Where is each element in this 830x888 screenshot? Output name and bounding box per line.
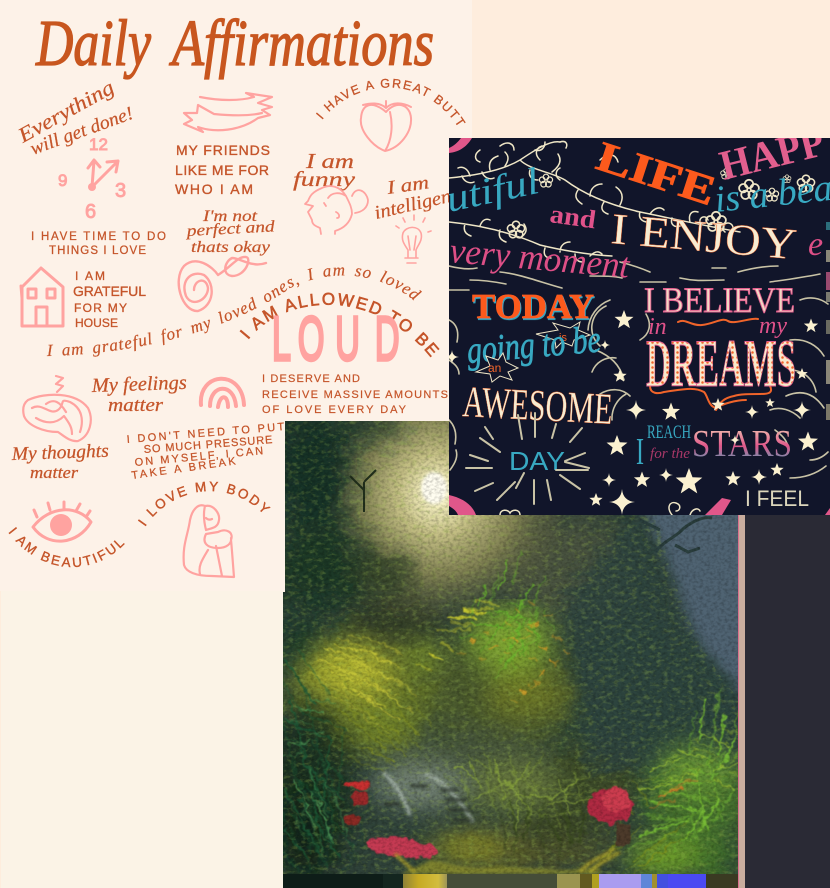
text: loud: LOUD bbox=[272, 304, 399, 374]
forest: bottom colour strip bbox=[283, 874, 739, 888]
text: i have time: I HAVE TIME TO DO bbox=[31, 231, 166, 243]
icon: self hug arm bbox=[184, 93, 272, 132]
text: my friends: MY FRIENDS bbox=[176, 142, 270, 158]
text: i don't need to put bbox=[126, 421, 285, 482]
text: day: DAY bbox=[509, 446, 565, 476]
text: my thoughts matter bbox=[10, 441, 109, 482]
edge: pink line bbox=[738, 515, 739, 888]
text: i reach for the stars: for the bbox=[650, 446, 690, 462]
text: i am funny bbox=[293, 149, 356, 191]
panel: forest painting bbox=[268, 410, 760, 888]
forest: distant tree branches bbox=[640, 518, 712, 552]
text: i am allowed to be: I AM ALLOWED TO BE bbox=[240, 292, 440, 358]
text: my thoughts matter: My thoughts bbox=[10, 441, 109, 465]
forest: sunlight glow bbox=[332, 421, 558, 618]
icon: laughing face bbox=[305, 186, 368, 234]
text: i reach for the stars: REACH bbox=[647, 422, 691, 443]
decoration: swirls bbox=[449, 298, 828, 478]
decoration: flowers bbox=[507, 169, 815, 238]
text: everything will get done bbox=[13, 75, 136, 160]
forest: mid detail patches bbox=[285, 606, 735, 870]
forest: yellow light on water bbox=[400, 860, 600, 874]
text: i am grateful for my house: HOUSE bbox=[75, 316, 118, 330]
text: i am intelligent: intelligent bbox=[372, 184, 460, 224]
text: awesome: AWESOME bbox=[461, 377, 614, 434]
text: i am funny: I am bbox=[305, 149, 354, 173]
title: Affirmations bbox=[169, 7, 434, 80]
forest: background colour masses bbox=[268, 515, 750, 880]
forest: red flowers bbox=[344, 781, 632, 862]
forest: dark rocks bbox=[384, 786, 472, 820]
text: i have a great butt: I HAVE A GREAT BUTT bbox=[316, 78, 466, 126]
text: i deserve: I DESERVE AND bbox=[262, 373, 360, 385]
icon: light bulb bbox=[396, 215, 431, 263]
text: i am funny: funny bbox=[293, 167, 356, 191]
text: i don't need to put: SO MUCH PRESSURE bbox=[143, 434, 273, 456]
text: going to be: going to be bbox=[465, 318, 602, 372]
text: in my: in bbox=[648, 314, 667, 340]
icon: eye bbox=[33, 502, 91, 541]
forest: tree in the light bbox=[350, 470, 376, 512]
icon: scribble bbox=[179, 257, 266, 311]
text: i don't need to put: TAKE A BREAK bbox=[131, 455, 237, 482]
icon: pink fragments bbox=[449, 138, 830, 515]
forest: texture bbox=[283, 421, 739, 875]
icon: burst is: is bbox=[559, 332, 567, 344]
text: e: e bbox=[808, 226, 823, 263]
text: my friends: WHO I AM bbox=[175, 181, 253, 197]
icon: house bbox=[21, 268, 63, 326]
text: i am intelligent bbox=[372, 172, 460, 224]
text: every moment: very moment bbox=[448, 230, 632, 286]
decoration: wavy divider lines bbox=[449, 262, 820, 290]
text: i don't need to put: ON MYSELF, I CAN bbox=[134, 445, 264, 469]
panel: dark side block bbox=[745, 515, 830, 888]
forest: moss ribbon bbox=[395, 848, 620, 872]
icon: burst is bbox=[536, 322, 590, 348]
forest: sun flare bbox=[421, 472, 447, 504]
forest: hill bbox=[560, 515, 745, 770]
text: everything will get done: will get done! bbox=[28, 103, 136, 160]
text: i feel: I FEEL bbox=[745, 486, 809, 511]
icon: clock: 3 bbox=[115, 180, 126, 202]
text: i am beautiful: I AM BEAUTIFUL bbox=[8, 527, 125, 568]
icon: clock bbox=[58, 135, 126, 223]
icon: seated girl bbox=[184, 505, 234, 577]
text: i deserve: RECEIVE MASSIVE AMOUNTS bbox=[262, 389, 448, 401]
forest: leaf strokes bbox=[275, 551, 751, 878]
text: i have time bbox=[31, 231, 166, 257]
panel: chalkboard lettering bbox=[442, 119, 830, 515]
text: in my: my bbox=[759, 313, 787, 339]
text: i'm not perfect: I'm not bbox=[202, 208, 258, 225]
text: i don't need to put: I DON'T NEED TO PUT bbox=[126, 421, 285, 446]
icon: clock: 6 bbox=[85, 201, 96, 223]
decoration: right edge noise bbox=[826, 222, 830, 420]
panel: daily affirmations poster bbox=[0, 0, 472, 591]
text: i enjoy: I ENJOY bbox=[609, 204, 799, 269]
decoration: sun rays around day bbox=[466, 413, 589, 504]
text: my friends bbox=[175, 142, 270, 197]
decoration: bottom scrolls bbox=[500, 503, 700, 515]
text: i reach for the stars: STARS bbox=[692, 423, 792, 465]
text: everything will get done: Everything bbox=[13, 75, 118, 148]
text: i am grateful for my house: I AM bbox=[75, 269, 105, 283]
text: and: and bbox=[548, 199, 598, 234]
text: i have time: THINGS I LOVE bbox=[49, 245, 146, 257]
text: i deserve: OF LOVE EVERY DAY bbox=[262, 404, 407, 416]
text: i reach for the stars: I bbox=[636, 431, 644, 473]
forest: waterfall bbox=[383, 772, 473, 822]
edge: tan strip bbox=[739, 515, 745, 888]
text: my friends: LIKE ME FOR bbox=[175, 162, 269, 178]
text: my feelings matter: matter bbox=[108, 395, 164, 416]
title: Daily bbox=[35, 7, 152, 80]
forest: foliage speckle bbox=[283, 421, 739, 875]
icon: burst an: an bbox=[488, 361, 501, 375]
text: my thoughts matter: matter bbox=[30, 463, 78, 482]
text: i am grateful for my loved ones: I am grateful for my loved ones, I am so loved bbox=[46, 267, 422, 357]
icon: clock: 9 bbox=[58, 171, 67, 190]
text: i'm not perfect bbox=[185, 208, 276, 256]
text: utiful: utiful bbox=[442, 160, 543, 221]
icon: stars bbox=[445, 310, 818, 515]
forest: misty sky bbox=[639, 515, 738, 694]
title bbox=[35, 7, 434, 80]
text: i am grateful for my house bbox=[73, 269, 146, 330]
text: i reach for the stars bbox=[636, 422, 792, 473]
text: i believe: I BELIEVE bbox=[644, 280, 795, 320]
text: i am grateful for my house: FOR MY bbox=[74, 301, 127, 315]
text: my feelings matter: My feelings bbox=[90, 372, 187, 397]
forest: tree canopy on the left bbox=[272, 410, 415, 662]
text: today: TODAY bbox=[472, 287, 594, 326]
text: i deserve bbox=[262, 373, 448, 416]
text: my feelings matter bbox=[90, 372, 187, 416]
panel: lower left blank sheet bbox=[1, 591, 284, 888]
icon: clock: 12 bbox=[89, 135, 108, 154]
text: i am intelligent: I am bbox=[385, 172, 430, 199]
icon: brain bbox=[23, 376, 91, 441]
text: i love my body: I LOVE MY BODY bbox=[138, 481, 271, 526]
text: life: LIFE bbox=[591, 134, 721, 215]
text: in my bbox=[648, 313, 787, 340]
decoration: flourish orange bbox=[650, 319, 771, 410]
text: i am grateful for my house: GRATEFUL bbox=[73, 283, 146, 299]
text: i'm not perfect: perfect and bbox=[185, 218, 276, 240]
text: i'm not perfect: thats okay bbox=[191, 239, 271, 256]
icon: rainbow bbox=[201, 379, 244, 407]
icon: peach bbox=[361, 101, 411, 151]
decoration: floral vines bbox=[449, 141, 740, 262]
icon: burst an bbox=[476, 353, 518, 382]
